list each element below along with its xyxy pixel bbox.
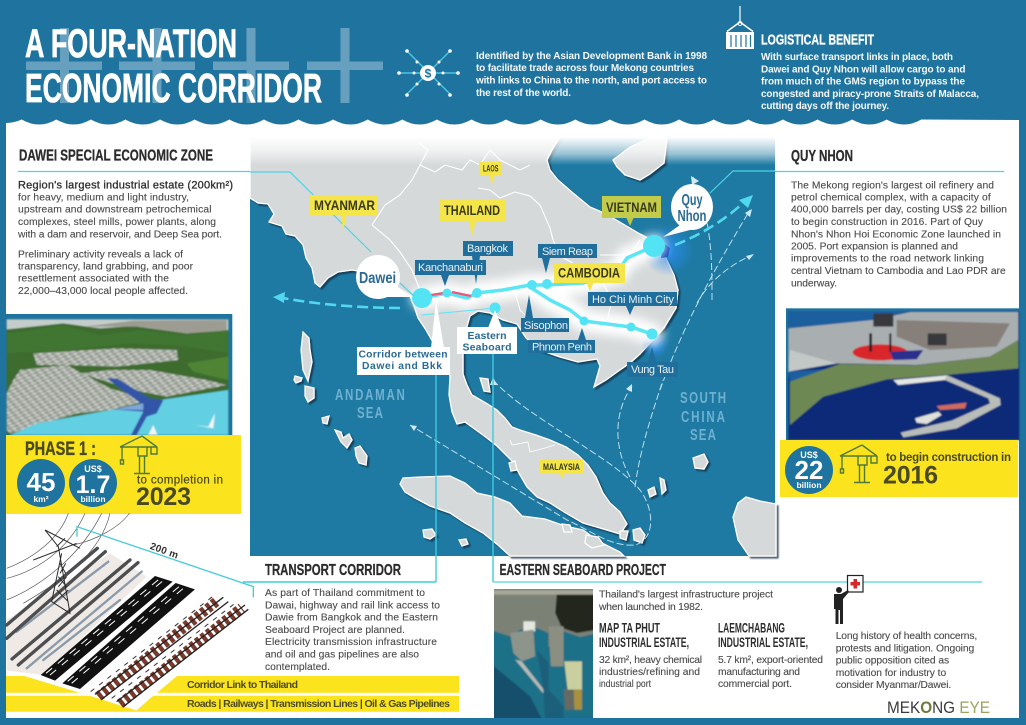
intro text: with links to China to the north, and port access to: [475, 76, 707, 86]
transport corridor text: and oil and gas pipelines are also: [265, 649, 419, 660]
body text: [791, 180, 1007, 289]
decorative plus signs: [26, 28, 383, 103]
title: ECONOMIC CORRIDOR: [25, 65, 322, 111]
city label: Ho Chi Minh City: Ho Chi Minh City: [592, 294, 674, 306]
callout: Eastern Seaboard: [457, 310, 517, 354]
icon: network with dollar hub: $: [425, 66, 432, 80]
logistical benefit: cutting days off the journey.: [761, 101, 889, 112]
route glow: [422, 246, 654, 334]
transport corridor text: contemplated.: [265, 662, 330, 673]
callout: Eastern Seaboard: Eastern: [468, 330, 506, 342]
panel: Eastern Seaboard project: [490, 562, 982, 722]
icon: crane: [840, 445, 877, 482]
map sea: [250, 137, 775, 556]
construction text: [883, 452, 1011, 490]
ground plane: [7, 527, 253, 710]
shipping lanes: [410, 177, 752, 545]
logistical benefit: LOGISTICAL BENEFIT: [761, 32, 874, 48]
glow around Vung Tau: [641, 331, 669, 359]
logistical benefit: congested and piracy-prone Straits of Malacca,: [761, 89, 979, 100]
label: Myanmar: [310, 195, 378, 231]
pipeline shadows: [17, 562, 142, 668]
highway bands: [41, 576, 195, 689]
body text: with a dam and reservoir, and Deep Sea port.: [17, 229, 222, 240]
completion text: [136, 474, 223, 511]
intro lines: when launched in 1982.: [598, 602, 703, 613]
corridor route: [422, 246, 654, 334]
construction text: 2016: [883, 462, 938, 490]
dashed export arrow east: [675, 195, 753, 245]
column: Map Ta Phut: INDUSTRIAL ESTATE,: [599, 634, 689, 650]
city label: Vung Tau: [627, 362, 678, 377]
pink corridor segment: [431, 292, 471, 296]
bubble: Dawei: Dawei: [359, 270, 396, 287]
sea labels: [335, 385, 726, 443]
completion text: 2023: [136, 483, 191, 511]
heading: DAWEI SPECIAL ECONOMIC ZONE: [19, 148, 213, 165]
map top fade: [250, 137, 775, 165]
title: A FOUR-NATION: [25, 22, 237, 66]
intro text: Identified by the Asian Development Bank in 1998: [476, 51, 707, 62]
glow around Quy Nhon: [642, 224, 694, 276]
city label: Siem Reap: Siem Reap: [542, 246, 593, 258]
callout: corridor between Dawei and Bkk: Dawei and Bkk: [362, 361, 442, 372]
body text: 2005. Port expansion is planned and: [791, 242, 958, 253]
sea labels: SOUTH: [680, 388, 726, 406]
callout: corridor between Dawei and Bkk: Corridor between: [358, 350, 448, 360]
country borders: [372, 142, 640, 452]
completion text: to completion in: [137, 474, 223, 486]
stat: US$ 22 billion: billion: [796, 480, 822, 490]
label: Laos: [479, 162, 502, 185]
label: Thailand: THAILAND: [444, 202, 500, 218]
body text: 400,000 barrels per day, costing US$ 22 billion: [791, 205, 1007, 216]
intro text: [475, 51, 707, 99]
column: Map Ta Phut: 32 km², heavy chemical: [599, 655, 702, 666]
column: Laemchabang: INDUSTRIAL ESTATE,: [718, 634, 808, 650]
shipping lane arrowheads: [410, 176, 754, 431]
city label: Sisophon: Sisophon: [524, 320, 568, 332]
body text: The Mekong region's largest oil refinery and: [791, 180, 994, 191]
icon: shipping container on hook: [726, 6, 754, 49]
icon: network with dollar hub: [397, 49, 460, 97]
transport corridor heading: TRANSPORT CORRIDOR: [265, 562, 401, 579]
heading: QUY NHON: [791, 148, 853, 165]
column: Laemchabang: 5.7 km², export-oriented: [718, 655, 823, 666]
label: Cambodia: CAMBODIA: [558, 264, 620, 280]
transmission tower: [33, 530, 80, 613]
city label: Vung Tau: Vung Tau: [631, 364, 674, 376]
corridor illustration: [7, 513, 253, 710]
Sumatra: [400, 476, 624, 556]
body text: Preliminary activity reveals a lack of: [18, 249, 183, 260]
health concerns text: protests and litigation. Ongoing: [836, 643, 974, 654]
railway tracks: [91, 596, 248, 707]
label: Thailand: [439, 199, 506, 237]
map land: [250, 137, 776, 556]
health concerns text: Long history of health concerns,: [836, 631, 977, 642]
logistical benefit: With surface transport links in place, both: [761, 52, 953, 63]
Hainan: [613, 138, 667, 180]
body text: [17, 179, 233, 297]
label: Malaysia: [539, 459, 583, 479]
column: Map Ta Phut: industrial port: [599, 679, 651, 690]
intro text: the rest of the world.: [476, 88, 571, 99]
logistical benefit: Dawei and Quy Nhon will allow cargo to and: [761, 64, 966, 76]
icon: crane: [120, 436, 157, 474]
body text: Nhon's Nhon Hoi Economic Zone launched in: [791, 229, 1001, 240]
transport corridor text: Seaboard Project are planned.: [265, 625, 405, 636]
column: Laemchabang: manufacturing and: [718, 667, 800, 678]
route nodes: [412, 235, 665, 340]
width measure line: [77, 527, 253, 597]
callout lines down from the map: [436, 354, 493, 582]
stat: US$ 1.7 billion: 1.7: [76, 471, 110, 499]
stat: US$ 22 billion: [785, 446, 833, 494]
stat: 45 km2: km²: [33, 494, 49, 504]
yellow corridor bars: [6, 676, 459, 712]
label: Malaysia: MALAYSIA: [543, 462, 580, 473]
body text: for heavy, medium and light industry,: [18, 192, 189, 203]
body text: resettlement associated with the: [18, 274, 169, 285]
intro lines: Thailand's largest infrastructure project: [599, 590, 773, 601]
icon: person with medical sign: [834, 576, 863, 624]
transport corridor text: As part of Thailand commitment to: [265, 588, 425, 599]
column: Map Ta Phut: [599, 620, 702, 690]
callout: corridor between Dawei and Bkk: [357, 300, 450, 375]
transport corridor text: Dawai, highway and rail link access to: [265, 600, 440, 611]
logo: Mekong Eye: MEKONG EYE: [887, 699, 990, 717]
panel: Quy Nhon: [775, 148, 1007, 289]
health concerns text: motivation for industry to: [836, 668, 946, 679]
column: Map Ta Phut: MAP TA PHUT: [599, 620, 660, 636]
dashed export arrow west: [273, 292, 400, 308]
body text: petrol chemical complex, with a capacity of: [791, 193, 991, 204]
body text: 22,000–43,000 local people affected.: [18, 286, 188, 297]
intro text: to facilitate trade across four Mekong countries: [476, 63, 694, 74]
connector lines on map: [250, 171, 775, 296]
column: Laemchabang: LAEMCHABANG: [718, 620, 785, 636]
stat: US$ 22 billion: US$: [800, 450, 818, 460]
label: Laos: LAOS: [483, 164, 498, 174]
power lines: [7, 513, 129, 603]
phase heading: PHASE 1 :: [25, 438, 96, 460]
city label: Kanchanaburi: Kanchanaburi: [418, 262, 483, 274]
stat: 45 km2: [17, 459, 65, 507]
photo: Dawei industrial estate: [0, 314, 232, 436]
body text: central Vietnam to Cambodia and Lao PDR are: [791, 266, 1006, 277]
body text: Region's largest industrial estate (200km²): [18, 179, 233, 191]
panel: Dawei special economic zone: [17, 148, 250, 297]
city label: Bangkok: Bangkok: [467, 243, 508, 255]
stat: US$ 1.7 billion: [69, 459, 117, 507]
column: Map Ta Phut: industries/refining and: [599, 667, 700, 678]
body text: upstream and downstream petrochemical: [18, 205, 212, 216]
bubble: Quy Nhon: Nhon: [678, 208, 706, 225]
city label: Bangkok: [463, 241, 513, 256]
health concerns text: public opposition cited as: [836, 656, 949, 667]
measure label: 200 m: [148, 541, 180, 562]
sea labels: SEA: [357, 403, 383, 421]
pipelines: [7, 548, 138, 665]
label: Vietnam: [602, 196, 661, 226]
stat: US$ 1.7 billion: US$: [84, 464, 102, 474]
logistical benefit: from much of the GMS region to bypass the: [761, 77, 965, 88]
yellow corridor bars: Corridor Link to Thailand: [187, 679, 298, 691]
photo: Quy Nhon refinery: [786, 308, 1019, 440]
Borneo: [733, 497, 776, 556]
body text: improvements to the road network linking: [791, 254, 984, 265]
health concerns text: [836, 631, 977, 691]
panel: Quy Nhon stats: [780, 440, 1018, 497]
intro lines: [598, 590, 773, 613]
yellow corridor bars: Roads | Railways | Transmission Lines | Oil & Gas Pipelines: [187, 698, 450, 710]
callout: Eastern Seaboard: Seaboard: [462, 342, 512, 354]
column: Laemchabang: [718, 620, 823, 690]
sea labels: SEA: [690, 425, 716, 443]
body text: to begin construction in 2016. Part of Quy: [791, 217, 984, 228]
label: Myanmar: MYANMAR: [314, 197, 375, 213]
panel: phase 1 stats: [6, 435, 241, 514]
stat: US$ 1.7 billion: billion: [80, 494, 106, 504]
transport corridor text: Electricity transmission infrastructure: [265, 637, 437, 648]
transport corridor text: Dawie from Bangkok and the Eastern: [265, 613, 438, 624]
bubble: Quy Nhon: [663, 184, 713, 237]
city label pointers: [441, 256, 656, 362]
stat: US$ 22 billion: 22: [795, 455, 823, 485]
sea labels: CHINA: [681, 407, 725, 425]
logistical benefit: [761, 32, 979, 112]
stat: 45 km2: 45: [27, 467, 55, 497]
heading: EASTERN SEABOARD PROJECT: [500, 562, 666, 579]
label: Vietnam: VIETNAM: [606, 199, 657, 215]
Andaman islands and small islands: [301, 332, 312, 381]
photo: satellite view: [494, 589, 593, 718]
body text: complexes, steel mills, power plants, along: [18, 217, 216, 228]
bubble: Quy Nhon: Quy: [682, 192, 703, 209]
health concerns text: consider Myanmar/Dawei.: [836, 680, 951, 691]
highway lane marks: [46, 578, 185, 683]
sea labels: ANDAMAN: [335, 385, 405, 403]
title: [25, 22, 322, 111]
transport corridor text: [265, 588, 440, 673]
construction text: to begin construction in: [886, 452, 1011, 464]
body text: transparency, land grabbing, and poor: [18, 262, 194, 273]
city label: Phnom Penh: Phnom Penh: [532, 342, 592, 354]
bubble: Dawei: [356, 255, 413, 299]
map panel: [250, 137, 776, 582]
label: Cambodia: [554, 263, 625, 291]
body text: underway.: [791, 278, 837, 289]
column: Laemchabang: commercial port.: [718, 679, 792, 690]
